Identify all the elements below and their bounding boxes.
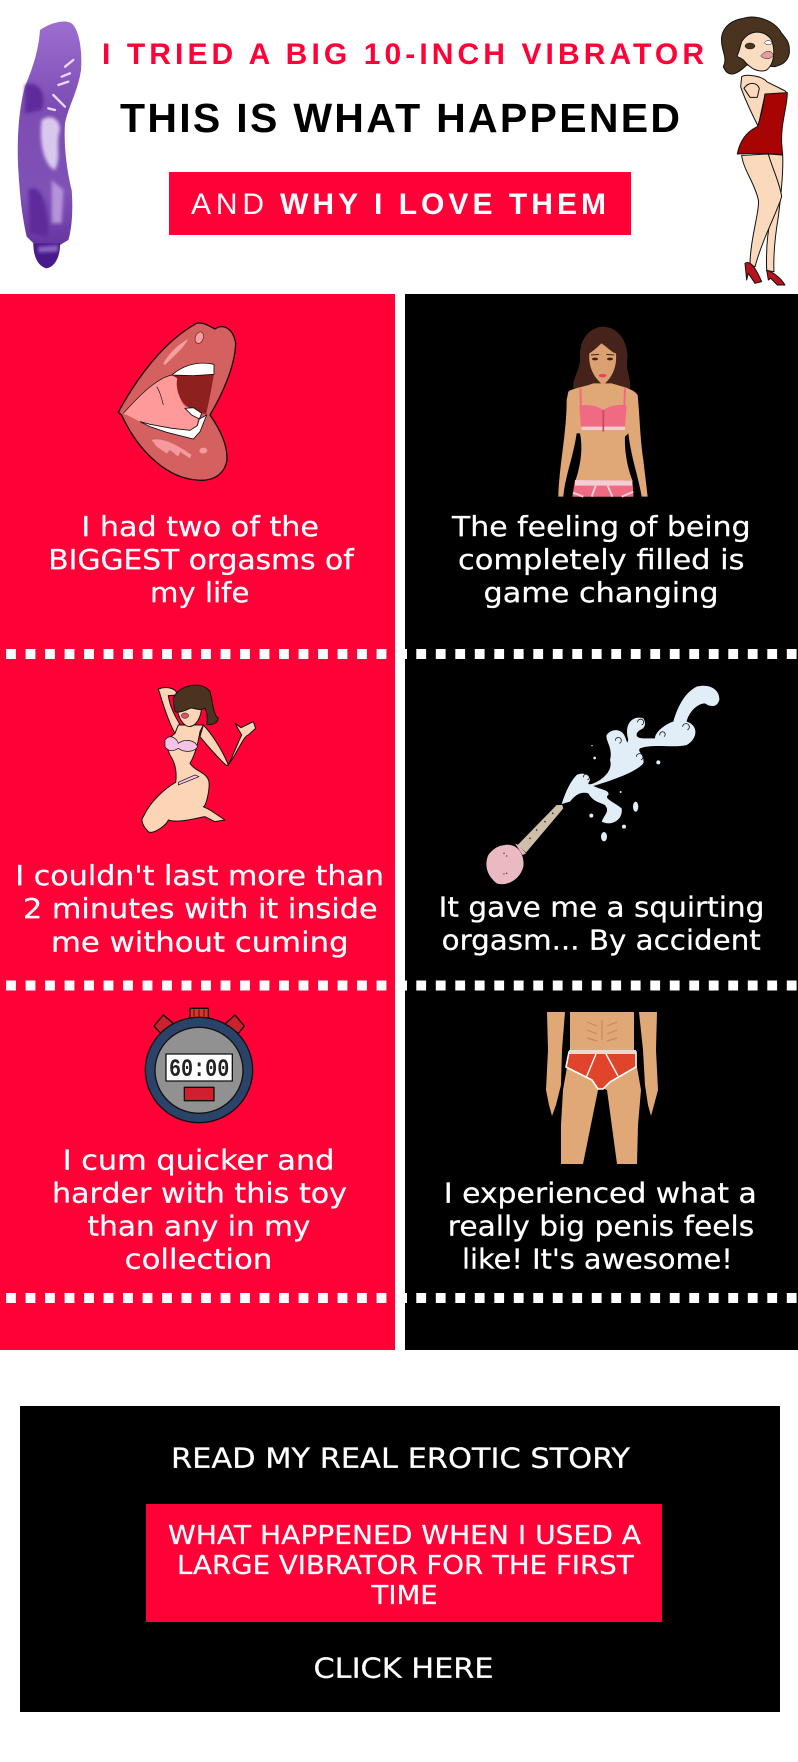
- text: card 4: orgasm... By accident: [442, 924, 761, 956]
- text: click here: CLICK HERE: [314, 1651, 494, 1684]
- panel: biggest orgasms: [48, 323, 355, 609]
- divider row 1: [6, 649, 798, 659]
- panel: completely filled: [451, 327, 751, 609]
- banner: and why I love them: WHY I LOVE THEM: [280, 188, 606, 221]
- callout: story title: TIME: [370, 1581, 438, 1611]
- text: card 3: me without cuming: [51, 927, 349, 959]
- banner: and why I love them: AND: [191, 188, 264, 221]
- panel: red column background: [0, 294, 395, 1350]
- icon: stopwatch: 60:00: [169, 1055, 229, 1084]
- text: card 5: [52, 1144, 347, 1275]
- panel: header: [18, 17, 789, 285]
- icon: male torso in briefs: [546, 1012, 658, 1164]
- icon: woman figure: [558, 327, 648, 497]
- text: card 2: completely filled is: [458, 544, 744, 576]
- text: card 1: I had two of the: [81, 511, 319, 543]
- banner: and why I love them: [169, 172, 631, 235]
- text: read my story: READ MY REAL EROTIC STORY: [171, 1442, 631, 1475]
- text: card 1: BIGGEST orgasms of: [48, 544, 355, 576]
- text: card 3: [15, 860, 384, 959]
- text: card 4: It gave me a squirting: [439, 892, 764, 924]
- text: card 6: really big penis feels: [448, 1210, 754, 1242]
- text: card 2: [451, 511, 751, 609]
- divider row 2: [6, 980, 798, 990]
- text: card 5: than any in my: [88, 1210, 310, 1242]
- text: card 5: I cum quicker and: [63, 1144, 334, 1176]
- icon: kneeling cartoon woman: [142, 685, 256, 832]
- text: card 3: 2 minutes with it inside: [23, 893, 378, 925]
- panel: cum quicker: [52, 1008, 347, 1275]
- text: card 5: collection: [125, 1243, 272, 1275]
- text: card 3: I couldn't last more than: [15, 860, 384, 892]
- callout: story title: LARGE VIBRATOR FOR THE FIRST: [177, 1551, 634, 1581]
- icon: bulb with water spray: [486, 686, 719, 884]
- icon: stopwatch: [145, 1008, 253, 1123]
- text: card 6: I experienced what a: [444, 1177, 757, 1209]
- panel: squirting: [439, 686, 764, 956]
- text: card 6: [444, 1177, 757, 1275]
- text: card 1: [48, 511, 355, 609]
- text: card 2: The feeling of being: [451, 511, 751, 543]
- panel: last two minutes: [15, 685, 384, 959]
- text: card 5: harder with this toy: [52, 1177, 347, 1209]
- text: card 2: game changing: [484, 577, 719, 609]
- text: card 1: my life: [150, 577, 249, 609]
- text: card 4: [439, 892, 764, 956]
- callout: story title: WHAT HAPPENED WHEN I USED A: [168, 1521, 641, 1551]
- heading: red title: I TRIED A BIG 10-INCH VIBRATOR: [102, 38, 704, 71]
- icon: open mouth: [118, 323, 236, 480]
- divider row 3: [6, 1293, 798, 1303]
- panel: black column background: [405, 294, 798, 1350]
- callout: story title: [146, 1504, 662, 1622]
- panel: what it feels like: [444, 1012, 757, 1275]
- icon: cartoon woman in red dress: [721, 17, 789, 285]
- text: card 6: like! It's awesome!: [462, 1243, 733, 1275]
- heading: black title: THIS IS WHAT HAPPENED: [120, 95, 680, 141]
- panel: call to action: [20, 1406, 780, 1712]
- icon: purple toy: [18, 21, 81, 268]
